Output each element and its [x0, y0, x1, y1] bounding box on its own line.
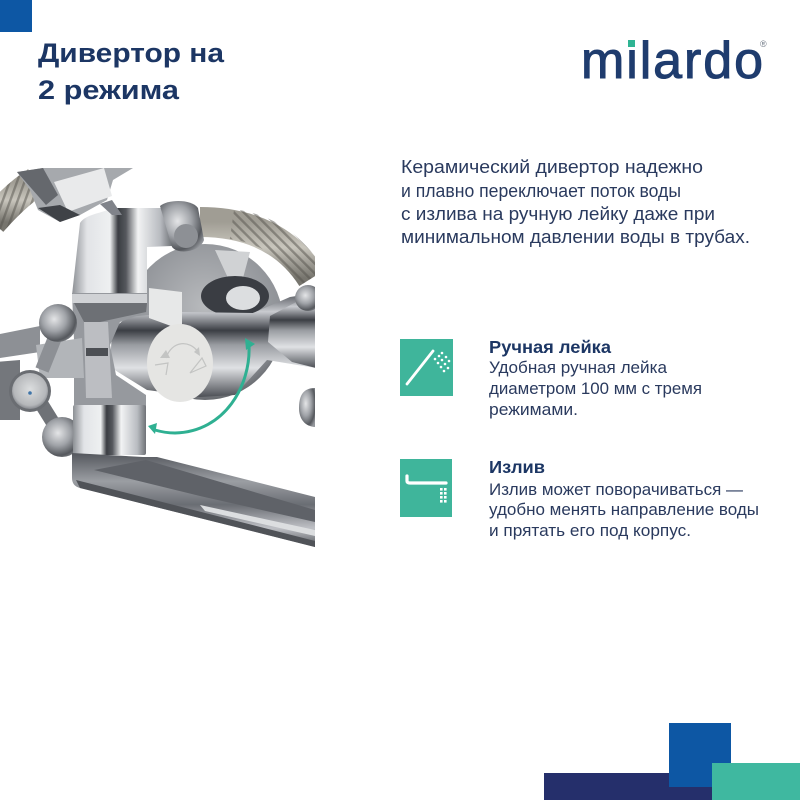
- right handle: [268, 302, 315, 368]
- intro paragraph: и плавно переключает поток воды: [401, 181, 681, 201]
- text: spout: Излив может поворачиваться —: [489, 480, 743, 499]
- arrow: diverter direction: [148, 338, 255, 434]
- title: Дивертор на: [38, 38, 225, 68]
- feature: hand shower: [400, 337, 702, 419]
- intro paragraph: Керамический дивертор надежно: [401, 157, 703, 177]
- left handle: [0, 326, 40, 358]
- collar: [160, 201, 204, 251]
- spout: [72, 453, 315, 547]
- text: spout: и прятать его под корпус.: [489, 521, 691, 540]
- text: hand shower: режимами.: [489, 400, 578, 419]
- corner square: top left: [0, 0, 32, 32]
- wall plate: [127, 244, 283, 400]
- logo: milardo: milardo: [581, 32, 763, 90]
- intro paragraph: минимальном давлении воды в трубах.: [401, 227, 750, 247]
- heading: hand shower: Ручная лейка: [489, 337, 611, 357]
- corner blocks: bottom right: [544, 723, 800, 800]
- text: hand shower: [489, 358, 702, 419]
- lower collar: [73, 405, 146, 455]
- intro paragraph: с излива на ручную лейку даже при: [401, 204, 715, 224]
- heading: spout: Излив: [489, 457, 545, 477]
- hand shower hose: [0, 182, 36, 222]
- title: 2 режима: [38, 75, 180, 105]
- intro paragraph: [401, 157, 750, 247]
- horizontal body: [110, 293, 316, 397]
- handle cap: [12, 373, 48, 409]
- valve junction: [72, 293, 147, 407]
- icon: hand shower: [400, 339, 453, 396]
- icon: spout: [400, 459, 452, 517]
- logo: milardo: ®: [760, 39, 767, 49]
- text: hand shower: диаметром 100 мм с тремя: [489, 379, 702, 398]
- feature: spout: [400, 457, 759, 540]
- hand shower bracket: [17, 168, 133, 222]
- faucet illustration: [0, 168, 321, 547]
- right hose: [200, 222, 312, 278]
- diverter tab: [149, 288, 182, 330]
- upper body: [72, 208, 172, 295]
- text: spout: удобно менять направление воды: [489, 500, 759, 519]
- diverter dial: [147, 324, 213, 402]
- text: hand shower: Удобная ручная лейка: [489, 358, 668, 377]
- text: spout: [489, 480, 759, 540]
- title: [38, 38, 225, 105]
